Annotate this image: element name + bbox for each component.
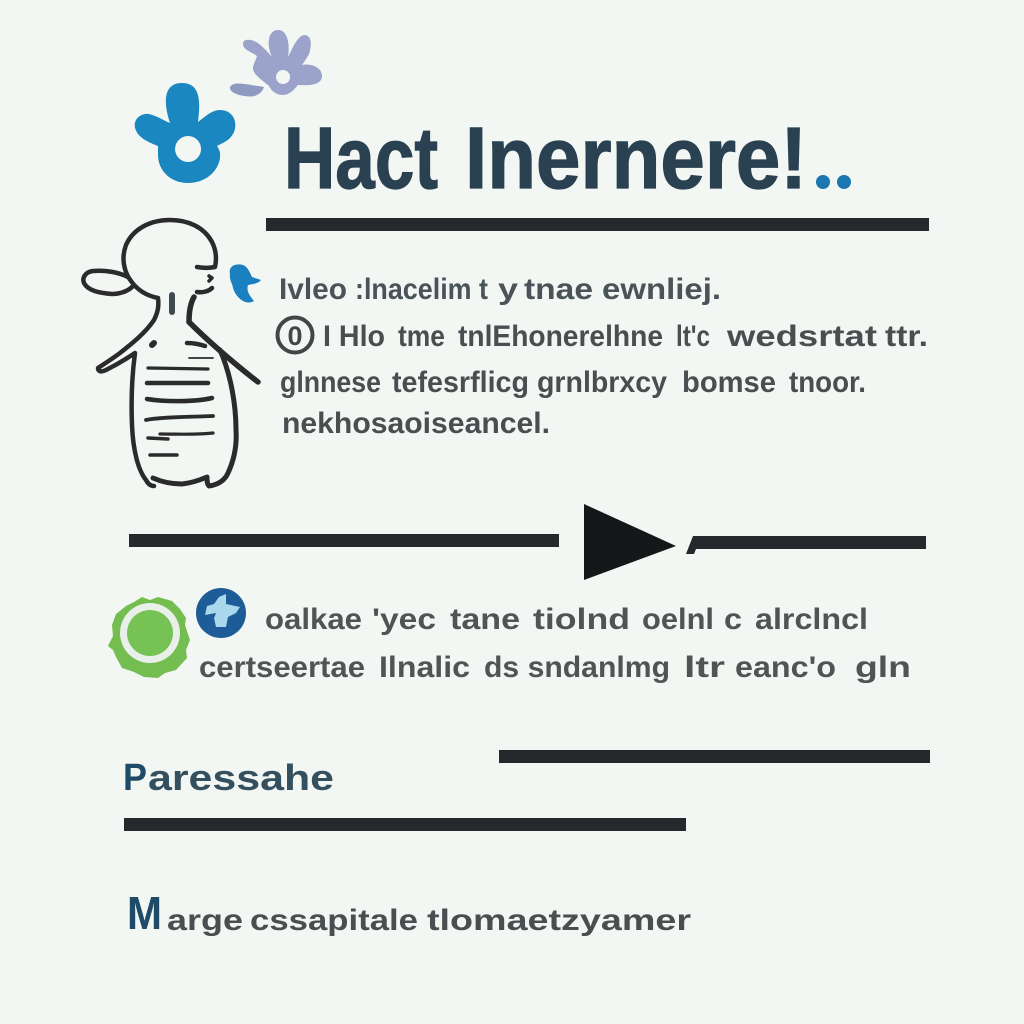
- text block: intro: [278, 273, 928, 440]
- middle line 1: tiolnd: [533, 603, 630, 636]
- middle line 2: eanc'o: [735, 651, 836, 684]
- person neck mark: [169, 295, 175, 312]
- middle line 1: [265, 603, 868, 636]
- text line 1: [279, 273, 721, 306]
- text line 3: glnnese: [280, 366, 381, 399]
- text line 1: tnae: [524, 273, 593, 306]
- subheading: Paressahe: aressahe: [148, 757, 334, 798]
- arrow divider: [129, 504, 926, 580]
- text line 2: wedsrtat: [726, 320, 877, 353]
- title rule: [266, 218, 929, 231]
- middle line 1: oelnl: [642, 603, 714, 636]
- person ribs: [148, 368, 208, 369]
- text line 2: I Hlo: [323, 320, 385, 353]
- text line 3: tnoor.: [789, 366, 866, 399]
- subheading: Marge: [127, 887, 691, 939]
- icon: green gear: [108, 597, 190, 678]
- person chest marks: [152, 343, 154, 345]
- text line 1: ewnliej.: [602, 273, 721, 306]
- title: Inernere!: [465, 110, 807, 207]
- text line 1: y: [498, 273, 518, 306]
- closing line: arge: [167, 904, 243, 937]
- middle line 2: ltr: [684, 651, 725, 684]
- middle line 2: [199, 651, 911, 684]
- icon: numbered circle: 0: [287, 321, 303, 351]
- text line 3: grnlbrxcy: [537, 366, 667, 399]
- text line 2: tme: [398, 320, 445, 353]
- icon: lavender petal: [230, 83, 264, 97]
- rule right: [499, 750, 930, 763]
- closing line: tlomaetzyamer: [427, 904, 691, 937]
- arrow head: [584, 504, 676, 580]
- text block: middle: [199, 603, 911, 684]
- middle line 1: c: [724, 603, 742, 636]
- title trailing dots: [816, 175, 851, 189]
- closing line: cssapitale: [250, 904, 418, 937]
- middle line 2: certseertae: [199, 651, 365, 684]
- middle line 1: oalkae: [265, 603, 362, 636]
- middle line 2: gln: [855, 651, 911, 684]
- middle line 1: 'yec: [372, 603, 436, 636]
- subheading: Marge: M: [127, 887, 162, 939]
- text line 3: bomse: [682, 366, 776, 399]
- person nose: [209, 276, 212, 281]
- rule left: [124, 818, 686, 831]
- text line 4: nekhosaoiseancel.: [282, 407, 550, 440]
- icon: small blue bird: [230, 264, 261, 303]
- closing line: [167, 904, 691, 937]
- icon: person outline: [83, 220, 258, 486]
- icon: lavender flower: [230, 30, 322, 97]
- text line 3: tefesrflicg: [392, 366, 529, 399]
- title: [284, 110, 807, 207]
- middle line 1: alrclncl: [755, 603, 868, 636]
- text line 1: Ivleo: [279, 273, 347, 306]
- subheading: Paressahe: P: [123, 757, 147, 799]
- title: Hact: [284, 110, 438, 207]
- text line 2: ttr.: [885, 320, 928, 353]
- icon: numbered circle: [278, 318, 312, 352]
- icon: blue flower: [135, 83, 235, 183]
- text line 2: lt'c: [676, 320, 710, 353]
- text line 1: :lnacelim t: [355, 273, 488, 306]
- text line 3: [280, 366, 866, 399]
- middle line 2: Ilnalic: [379, 651, 470, 684]
- text line 2: tnlEhonerelhne: [458, 320, 663, 353]
- middle line 1: tane: [450, 603, 520, 636]
- icon: blue badge: [196, 588, 246, 638]
- text line 2: [323, 320, 928, 353]
- middle line 2: ds sndanlmg: [484, 651, 670, 684]
